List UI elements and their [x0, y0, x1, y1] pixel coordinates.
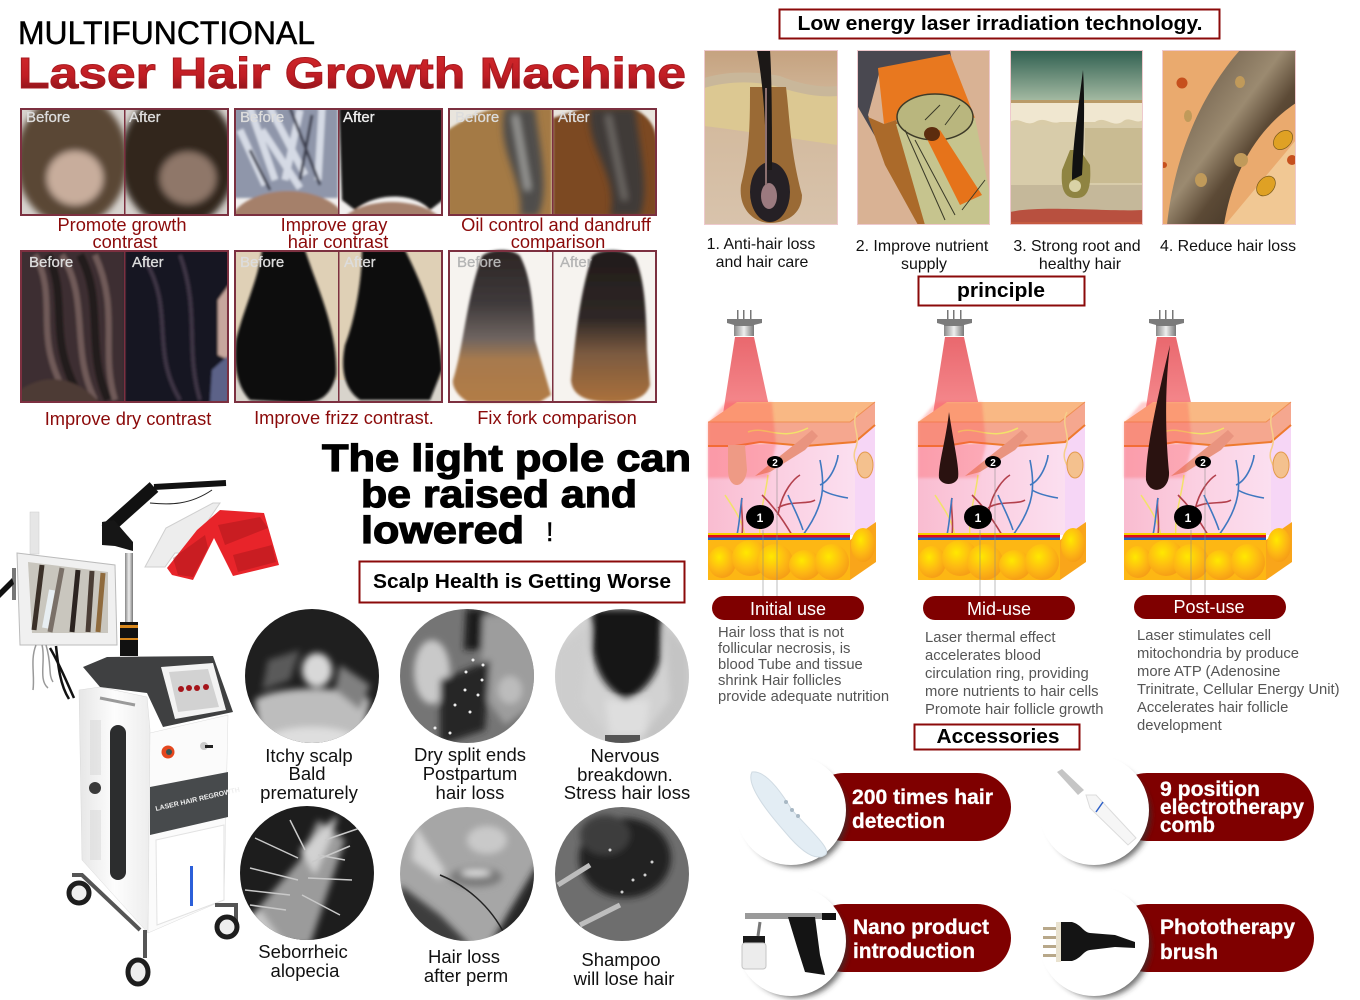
accessory: hair detector: 200 times hair	[852, 786, 993, 809]
diagram: mid-use: 1	[975, 511, 982, 525]
accessory: phototherapy brush	[1039, 886, 1314, 998]
scalp captions: will lose hair	[573, 968, 674, 989]
photo: promote growth	[20, 108, 229, 216]
result captions: Improve gray	[281, 214, 388, 235]
scalp captions: Itchy scalp	[265, 745, 353, 766]
stage descriptions: Laser stimulates cell	[1137, 628, 1271, 644]
photo: dry hair: After	[132, 254, 164, 271]
result captions: Promote growth	[57, 214, 187, 235]
diagram: post-use: 1	[1185, 511, 1192, 525]
stage labels: Post-use	[1173, 597, 1245, 617]
accessory: nano spray gun: Nano product	[853, 916, 989, 939]
result captions: contrast	[92, 231, 158, 252]
illustration: nutrient supply	[857, 50, 990, 225]
accessory: hair detector	[736, 755, 1011, 867]
panel: scalp problems	[240, 609, 689, 945]
stage descriptions: shrink Hair follicles	[718, 673, 841, 689]
illustration: strong root	[1010, 50, 1143, 225]
title: MULTIFUNCTIONAL	[18, 15, 315, 51]
diagram: mid-use: 2	[990, 458, 996, 469]
scalp captions: Dry split ends	[414, 744, 526, 765]
result captions: hair contrast	[288, 231, 388, 252]
photo: fork ends: Before	[457, 254, 501, 271]
scalp captions: breakdown.	[577, 764, 673, 785]
heading box: principle	[918, 276, 1084, 306]
technology captions: 3. Strong root and	[1013, 238, 1141, 255]
diagram: initial use: 2	[772, 458, 778, 469]
heading box: scalp health: Scalp Health is Getting Worse	[373, 571, 671, 593]
illustration: follicle	[704, 50, 838, 225]
scalp captions: after perm	[424, 965, 508, 986]
photo: oil control: After	[558, 109, 590, 126]
technology captions	[707, 236, 1296, 273]
photo: dry hair: Before	[29, 254, 73, 271]
stage descriptions: Hair loss that is not	[718, 625, 844, 641]
diagram: initial use	[708, 310, 876, 596]
panel: before and after results	[16, 92, 657, 403]
wheels	[69, 875, 237, 984]
diagram: initial use: 1	[757, 511, 764, 525]
title	[18, 15, 686, 98]
accessory: electrotherapy comb: 9 position	[1160, 778, 1260, 801]
arm and light panel	[102, 483, 279, 656]
photo: gray hair: Before	[240, 109, 284, 126]
stage descriptions: Promote hair follicle growth	[925, 702, 1103, 718]
photo: hair loss after perm	[400, 807, 540, 945]
technology captions: 2. Improve nutrient	[856, 238, 989, 255]
heading: light pole: The light pole can	[322, 438, 691, 480]
photo: dry split ends	[400, 609, 540, 745]
photo: promote growth: After	[129, 109, 161, 126]
photo: frizz	[234, 250, 443, 403]
stage labels: Initial use	[750, 599, 826, 619]
photo: shampoo hair loss	[555, 807, 689, 941]
diagram: mid-use	[918, 310, 1086, 596]
heading box: accessories: Accessories	[936, 726, 1060, 748]
scalp captions: Stress hair loss	[564, 782, 690, 803]
scalp captions: hair loss	[436, 782, 504, 803]
photo: gray hair	[234, 108, 443, 216]
scalp captions: Nervous	[591, 745, 659, 766]
accessory: nano spray gun	[736, 886, 1011, 998]
result captions: Fix fork comparison	[477, 407, 637, 428]
heading: light pole: !	[546, 517, 554, 547]
result captions	[45, 214, 652, 429]
photo: seborrheic alopecia	[240, 806, 374, 945]
scalp captions: alopecia	[271, 960, 340, 981]
photo: dry hair	[20, 250, 229, 403]
stage descriptions: more ATP (Adenosine	[1137, 664, 1280, 680]
photo: nervous breakdown	[555, 609, 689, 743]
accessory: electrotherapy comb	[1039, 755, 1314, 867]
accessory: electrotherapy comb: electrotherapy	[1160, 796, 1304, 819]
technology captions: supply	[901, 256, 947, 273]
photo: fork ends: After	[560, 254, 592, 271]
heading: light pole: be raised and	[361, 474, 637, 516]
cabinet	[79, 656, 241, 933]
technology captions: 4. Reduce hair loss	[1160, 238, 1296, 255]
scalp captions: Bald	[288, 763, 326, 784]
heading: light pole	[322, 438, 691, 552]
stage descriptions: circulation ring, providing	[925, 666, 1089, 682]
accessory: nano spray gun: introduction	[853, 940, 975, 963]
result captions: Improve frizz contrast.	[254, 407, 434, 428]
heading: light pole: lowered	[361, 510, 524, 552]
heading box: principle: principle	[957, 280, 1045, 302]
photo: gray hair: After	[343, 109, 375, 126]
photo: oil control: Before	[455, 109, 499, 126]
photo: promote growth: Before	[26, 109, 70, 126]
title: Laser Hair Growth Machine	[18, 49, 686, 98]
photo: frizz: After	[344, 254, 376, 271]
diagram: post-use	[1124, 310, 1292, 596]
result captions: Improve dry contrast	[45, 408, 211, 429]
stage labels	[712, 595, 1286, 620]
scalp captions: prematurely	[260, 782, 359, 803]
cabinet: LASER HAIR REGROWTH	[155, 787, 241, 813]
technology captions: healthy hair	[1039, 256, 1122, 273]
accessory: phototherapy brush: brush	[1160, 941, 1218, 964]
accessory: electrotherapy comb: comb	[1160, 814, 1215, 837]
stage descriptions: more nutrients to hair cells	[925, 684, 1099, 700]
stage descriptions: accelerates blood	[925, 648, 1041, 664]
scalp captions	[258, 744, 690, 989]
scalp captions: Hair loss	[428, 946, 500, 967]
stage descriptions: Laser thermal effect	[925, 630, 1056, 646]
scalp captions: Seborrheic	[258, 941, 348, 962]
stage descriptions: Accelerates hair follicle	[1137, 700, 1288, 716]
heading box: accessories	[914, 724, 1080, 750]
photo: oil control	[448, 108, 657, 216]
stage descriptions: Trinitrate, Cellular Energy Unit)	[1137, 682, 1340, 698]
diagram: post-use: 2	[1200, 458, 1206, 469]
stage descriptions: follicular necrosis, is	[718, 641, 850, 657]
photo: frizz: Before	[240, 254, 284, 271]
heading box: scalp health	[360, 562, 684, 602]
illustration: machine	[0, 483, 279, 984]
stage descriptions: provide adequate nutrition	[718, 689, 889, 705]
photo: itchy scalp	[245, 609, 379, 743]
stage descriptions	[718, 625, 1340, 734]
panel: technology illustrations	[704, 50, 1297, 225]
technology captions: 1. Anti-hair loss	[707, 236, 815, 253]
scalp captions: Postpartum	[423, 763, 517, 784]
monitor and cables	[0, 512, 117, 699]
photo: fork ends	[448, 250, 657, 403]
technology captions: and hair care	[716, 254, 809, 271]
result captions: comparison	[511, 231, 605, 252]
scalp captions: Shampoo	[581, 949, 661, 970]
illustration: reduce hair loss	[1161, 50, 1297, 225]
heading box: low energy laser: Low energy laser irradiation technology.	[798, 13, 1202, 35]
stage descriptions: blood Tube and tissue	[718, 657, 863, 673]
stage descriptions: development	[1137, 718, 1222, 734]
stage labels: Mid-use	[967, 599, 1031, 619]
accessory: phototherapy brush: Phototherapy	[1160, 916, 1295, 939]
accessory: hair detector: detection	[852, 810, 945, 833]
result captions: Oil control and dandruff	[461, 214, 652, 235]
heading box: low energy laser	[780, 10, 1220, 38]
stage descriptions: mitochondria by produce	[1137, 646, 1299, 662]
